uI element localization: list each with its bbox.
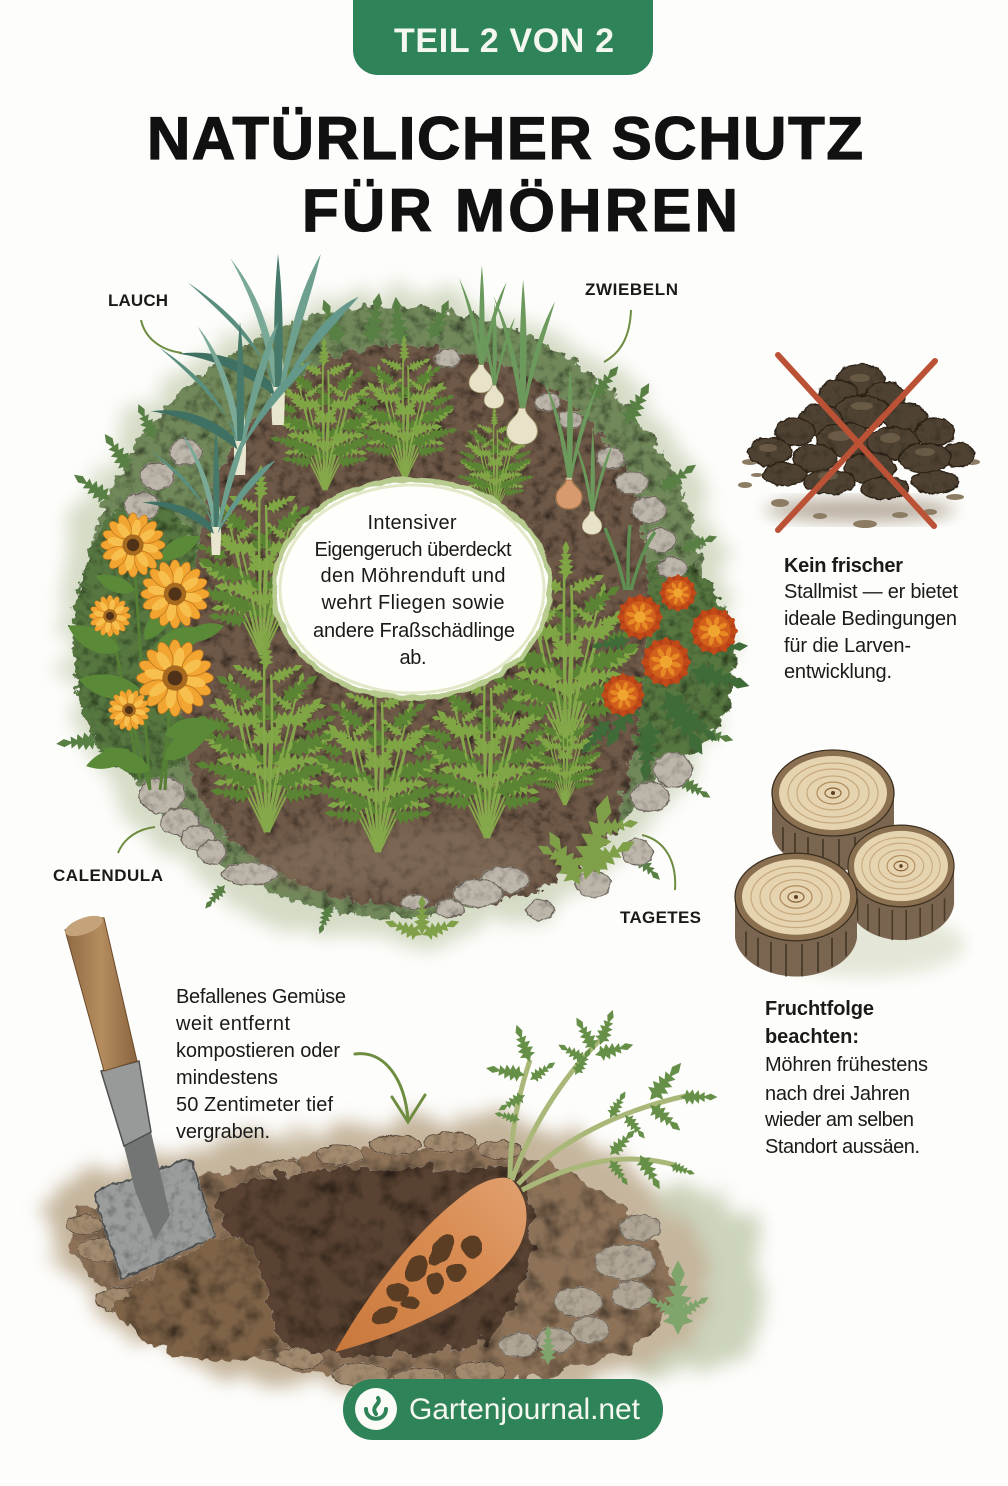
tagetes flowers: [575, 567, 753, 782]
label: Zwiebeln: ZWIEBELN: [585, 280, 678, 299]
title: [147, 105, 863, 244]
outer soil and moss: [52, 1115, 765, 1397]
text: fresh manure warning: Stallmist — er bietet: [784, 581, 958, 603]
central scent callout: Intensiver: [368, 512, 457, 534]
text: crop rotation: beachten:: [765, 1026, 859, 1048]
dark foliage behind flowers: [73, 500, 735, 780]
logo pill: Gartenjournal.net: [409, 1393, 641, 1426]
damage spots: [369, 1230, 482, 1328]
carrot body: [335, 1178, 527, 1352]
text: infested vegetables: 50 Zentimeter tief: [176, 1094, 333, 1116]
tree slices: [735, 750, 965, 977]
arrow into pit: [355, 1054, 425, 1122]
soil clods: [67, 1132, 522, 1388]
label: Tagetes: [620, 835, 701, 927]
text: fresh manure warning: entwicklung.: [784, 661, 892, 683]
label: Lauch: [108, 291, 182, 353]
text: crop rotation: Fruchtfolge: [765, 998, 874, 1020]
soil pit scene: [52, 1115, 765, 1397]
logo icon: [355, 1388, 397, 1430]
small weed: [540, 1260, 712, 1365]
title: NATÜRLICHER SCHUTZ: [147, 105, 863, 172]
parsley-like herb: [382, 790, 640, 943]
central scent callout: wehrt Fliegen sowie: [320, 592, 504, 614]
red cross: [778, 355, 935, 530]
text: crop rotation: nach drei Jahren: [765, 1083, 910, 1105]
header tab: TEIL 2 VON 2: [394, 22, 614, 60]
title: FÜR MÖHREN: [302, 177, 738, 244]
label: Calendula: [53, 827, 163, 885]
label: Zwiebeln: [585, 280, 678, 362]
stones on the right: [499, 1215, 661, 1357]
manure pile crossed out: [738, 355, 980, 530]
text: infested vegetables: kompostieren oder: [176, 1040, 340, 1062]
spade: [62, 912, 215, 1279]
text: crop rotation: wieder am selben: [764, 1109, 914, 1131]
logo pill: [343, 1379, 663, 1440]
central scent callout: andere Fraßschädlinge: [313, 620, 515, 642]
soil: [184, 345, 648, 907]
text: infested vegetables: weit entfernt: [175, 1013, 290, 1035]
text: infested vegetables: [175, 986, 346, 1143]
text: crop rotation: Möhren frühestens: [765, 1054, 928, 1076]
label: Lauch: LAUCH: [108, 291, 168, 310]
garden bed illustration: [55, 254, 753, 943]
carrot plants: [172, 335, 667, 865]
text: fresh manure warning: Kein frischer: [784, 555, 903, 577]
label: Calendula: CALENDULA: [53, 866, 163, 885]
text: infested vegetables: Befallenes Gemüse: [176, 986, 346, 1008]
central scent callout: [274, 480, 550, 698]
clods: [748, 364, 974, 499]
onions: [459, 265, 655, 590]
text: fresh manure warning: ideale Bedingungen: [784, 608, 957, 630]
soil heap in front of spade: [116, 1235, 280, 1362]
carrot leaves: [485, 1007, 717, 1193]
calendula flowers: [63, 499, 229, 790]
text: crop rotation: [764, 998, 928, 1158]
dark pit: [215, 1166, 533, 1357]
central scent callout: Eigengeruch überdeckt: [314, 539, 512, 561]
infested carrot: [335, 1007, 717, 1352]
leeks: [142, 254, 359, 555]
text: infested vegetables: vergraben.: [176, 1121, 270, 1143]
foliage rim: [55, 291, 735, 943]
text: fresh manure warning: für die Larven-: [784, 635, 911, 657]
text: infested vegetables: mindestens: [176, 1067, 278, 1089]
central scent callout: den Möhrenduft und: [320, 565, 506, 587]
text: crop rotation: Standort aussäen.: [765, 1136, 920, 1158]
label: Tagetes: TAGETES: [620, 908, 701, 927]
scattered dirt: [738, 459, 980, 528]
header tab: [353, 0, 653, 75]
central scent callout: ab.: [400, 647, 426, 669]
text: fresh manure warning: [784, 555, 958, 683]
stone border: [125, 349, 692, 920]
